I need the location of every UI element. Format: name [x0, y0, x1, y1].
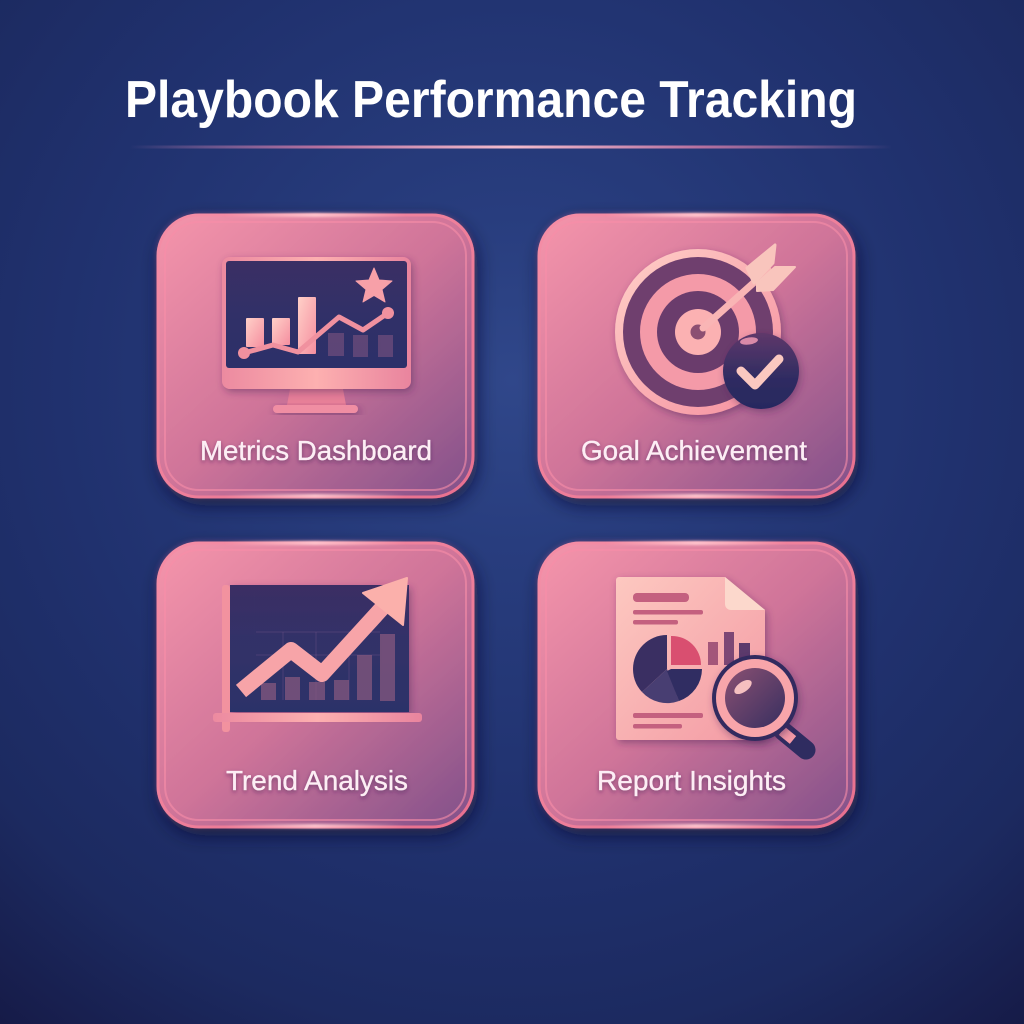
label: report insights: Report Insights — [597, 765, 786, 796]
icon: monitor with chart — [222, 257, 411, 413]
icon: target with arrow — [615, 245, 799, 415]
panel: goal achievement — [538, 213, 855, 498]
icon: check badge — [723, 333, 799, 409]
icon: report with magnifier — [616, 577, 806, 750]
pie chart — [633, 635, 702, 703]
trend line — [238, 307, 394, 359]
arrow: rising trend — [241, 578, 407, 691]
arrow — [703, 245, 795, 328]
report bars — [708, 632, 750, 665]
faded bars — [328, 333, 393, 357]
icon: trend chart — [213, 578, 422, 732]
chart grid — [256, 632, 380, 700]
label: metrics dashboard: Metrics Dashboard — [200, 435, 432, 466]
label: trend analysis: Trend Analysis — [226, 765, 408, 796]
text lines — [633, 593, 703, 728]
title divider — [130, 146, 892, 148]
panel: trend analysis — [157, 541, 474, 828]
bright bars — [246, 297, 316, 354]
label: goal achievement: Goal Achievement — [581, 435, 807, 466]
icon: star — [356, 268, 392, 302]
panel: metrics dashboard — [157, 213, 474, 498]
panel: report insights — [538, 541, 855, 828]
chart bars — [261, 634, 395, 701]
icon: magnifier — [712, 655, 806, 750]
title: Playbook Performance Tracking — [125, 71, 857, 129]
